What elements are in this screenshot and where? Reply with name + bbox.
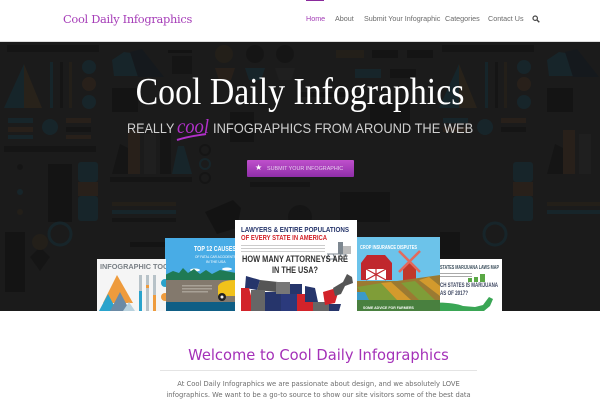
hero background pattern [4, 52, 600, 246]
subtitle: cool script word: cool [177, 116, 209, 138]
submit button [247, 160, 354, 177]
thumbnail: lawyers and attorneys: OF EVERY STATE IN AMERICA [241, 233, 328, 242]
hero subtitle [127, 116, 473, 141]
nav: home: Home [306, 14, 325, 23]
hero title: Cool Daily Infographics [136, 71, 464, 113]
thumbnail: crop insurance: SOME ADVICE FOR FARMERS [363, 306, 414, 310]
thumbnail: lawyers and attorneys [235, 220, 357, 311]
welcome paragraph [166, 380, 471, 399]
nav: contact: Contact Us [488, 14, 524, 23]
infographic thumbnails [97, 220, 502, 311]
subtitle: infographics: INFOGRAPHICS FROM AROUND THE WEB [213, 120, 473, 136]
heading divider [160, 370, 477, 371]
navigation menu [306, 0, 540, 23]
thumbnail: marijuana laws map: AS OF 2017? [440, 291, 468, 297]
thumbnail: crop insurance [357, 237, 440, 311]
thumbnail: top 12 causes [165, 238, 236, 311]
nav: about: About [335, 14, 354, 23]
welcome heading: Welcome to Cool Daily Infographics [188, 347, 449, 364]
subtitle: really: REALLY [127, 120, 174, 136]
thumbnail: infographic tools [97, 259, 166, 311]
button label: SUBMIT YOUR INFOGRAPHIC [267, 166, 343, 172]
thumbnail: top 12 causes: IN THE USA [206, 260, 226, 264]
thumbnail: lawyers and attorneys: IN THE USA? [272, 265, 318, 275]
site logo title: Cool Daily Infographics [63, 12, 192, 26]
nav: categories: Categories [445, 14, 480, 23]
welcome paragraph: infographics. We want to be a go-to source to show our site visitors some of the best data [166, 391, 471, 399]
welcome paragraph: At Cool Daily Infographics we are passionate about design, and we absolutely LOVE [177, 380, 460, 388]
hero panel [0, 42, 600, 311]
icon: star: ★ [255, 163, 262, 172]
icon: search [532, 15, 540, 23]
header bar [0, 0, 600, 42]
nav: submit: Submit Your Infographic [364, 14, 440, 23]
active tab marker [306, 0, 324, 1]
thumbnail: marijuana laws map [440, 259, 502, 311]
